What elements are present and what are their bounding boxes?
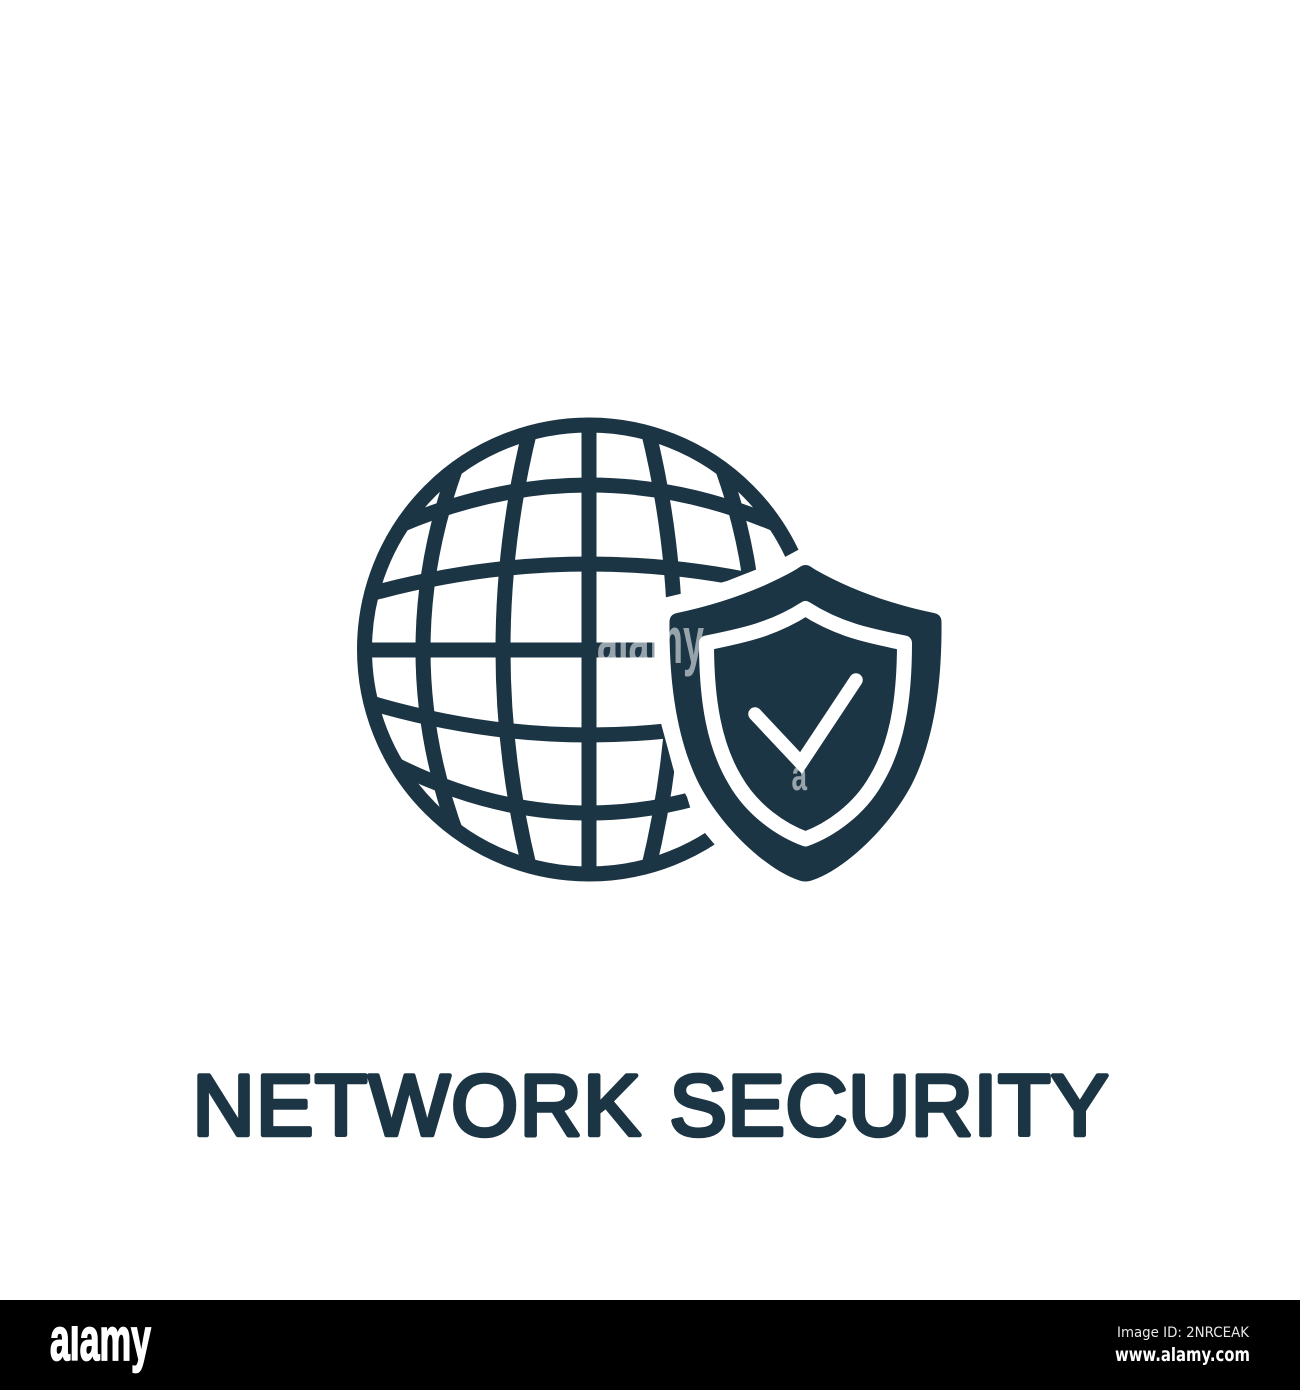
icon: network security globe and shield	[360, 420, 960, 900]
title	[192, 1058, 1108, 1154]
image id: Image ID: 2NRCEAK	[1117, 1325, 1250, 1341]
icon: wireframe globe	[360, 420, 814, 880]
title: NETWORK	[192, 1058, 640, 1154]
footer bar	[0, 1300, 1300, 1390]
watermark fragment: a: a	[792, 751, 807, 800]
watermark fragment: alamy: alamy	[597, 603, 704, 677]
shield cutout gap	[654, 545, 960, 900]
footer logo: alamy	[50, 1306, 151, 1373]
icon: shield with check mark	[669, 565, 942, 882]
website: www.alamy.com	[1115, 1344, 1250, 1366]
title: SECURITY	[670, 1058, 1108, 1154]
